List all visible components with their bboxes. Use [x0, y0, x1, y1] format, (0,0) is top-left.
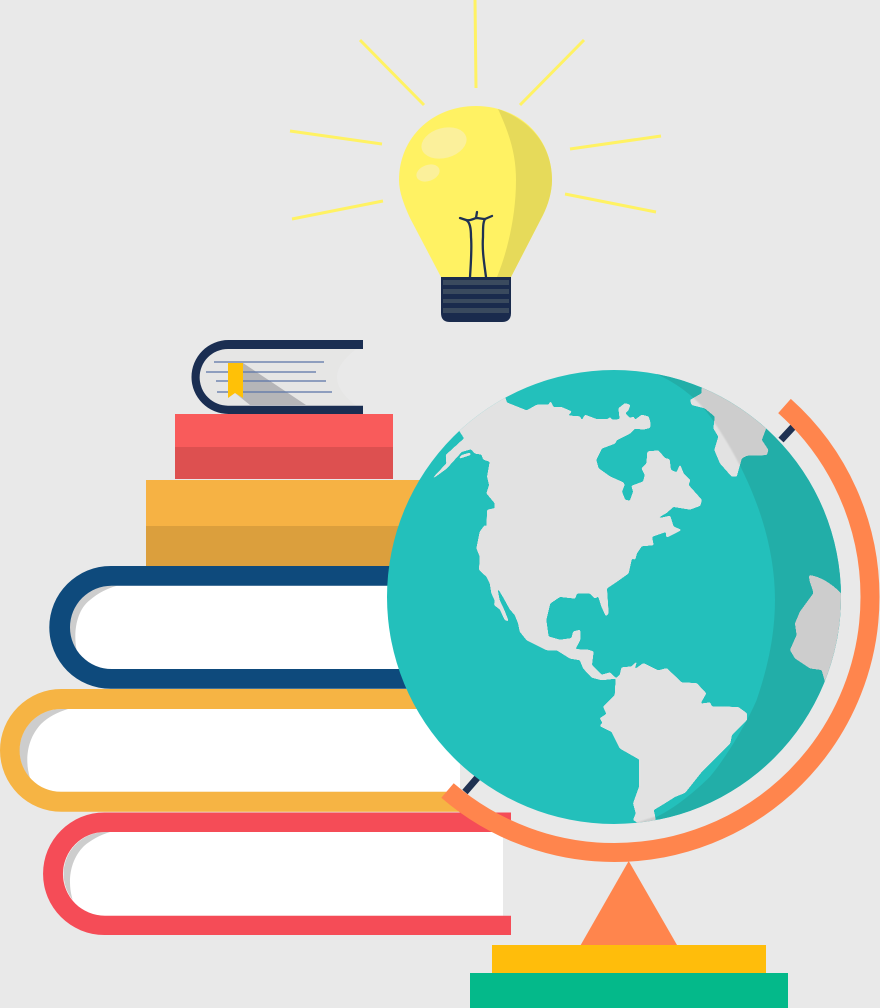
- globe stand: [470, 861, 788, 1008]
- continent: north and central america: [430, 373, 702, 680]
- globe shaded side: [656, 374, 841, 820]
- globe meridian ring: [448, 406, 870, 853]
- filament: [460, 212, 492, 277]
- bulb highlight small: [414, 161, 442, 185]
- stand yellow plinth: [492, 945, 766, 973]
- blue book pages: [70, 586, 430, 669]
- stand green base: [470, 973, 788, 1008]
- red closed book: [175, 414, 393, 479]
- bulb screw base: [441, 277, 511, 322]
- bookmark: [228, 363, 243, 398]
- continents: [434, 388, 841, 823]
- yellow book cover: [0, 689, 462, 812]
- bulb glass: [399, 106, 552, 277]
- bookmark shadow: [235, 363, 306, 405]
- south america shaded tip: [637, 817, 657, 827]
- globe axis pole: [465, 426, 794, 792]
- orange closed book: [146, 480, 436, 566]
- continent: greenland shaded part: [694, 388, 768, 466]
- bulb highlight large: [418, 123, 470, 163]
- red open-edge book: [43, 812, 511, 935]
- globe: [387, 370, 841, 824]
- blue book cover: [49, 566, 430, 689]
- yellow open-edge book: [0, 689, 462, 812]
- yellow book pages: [20, 709, 460, 792]
- light rays: [290, 0, 661, 219]
- red book cover: [43, 812, 511, 935]
- small book pages: [200, 349, 356, 406]
- yellow book page shadow: [19, 709, 68, 778]
- red book pages: [63, 832, 503, 916]
- text lines: [206, 362, 332, 392]
- blue open-edge book: [49, 566, 430, 689]
- small book cover: [192, 340, 363, 414]
- small book on top of stack: [192, 340, 363, 414]
- bulb shaded side: [497, 109, 552, 277]
- blue book page shadow: [67, 586, 117, 655]
- icon: lightbulb: [399, 106, 552, 322]
- continent: greenland lit part: [690, 370, 780, 477]
- continent: europe and africa edge: [790, 575, 841, 681]
- continent: alaska island: [458, 453, 470, 458]
- stand triangle: [581, 861, 677, 945]
- continent: south america: [600, 662, 747, 823]
- ocean: [387, 370, 841, 824]
- red book page shadow: [64, 832, 110, 900]
